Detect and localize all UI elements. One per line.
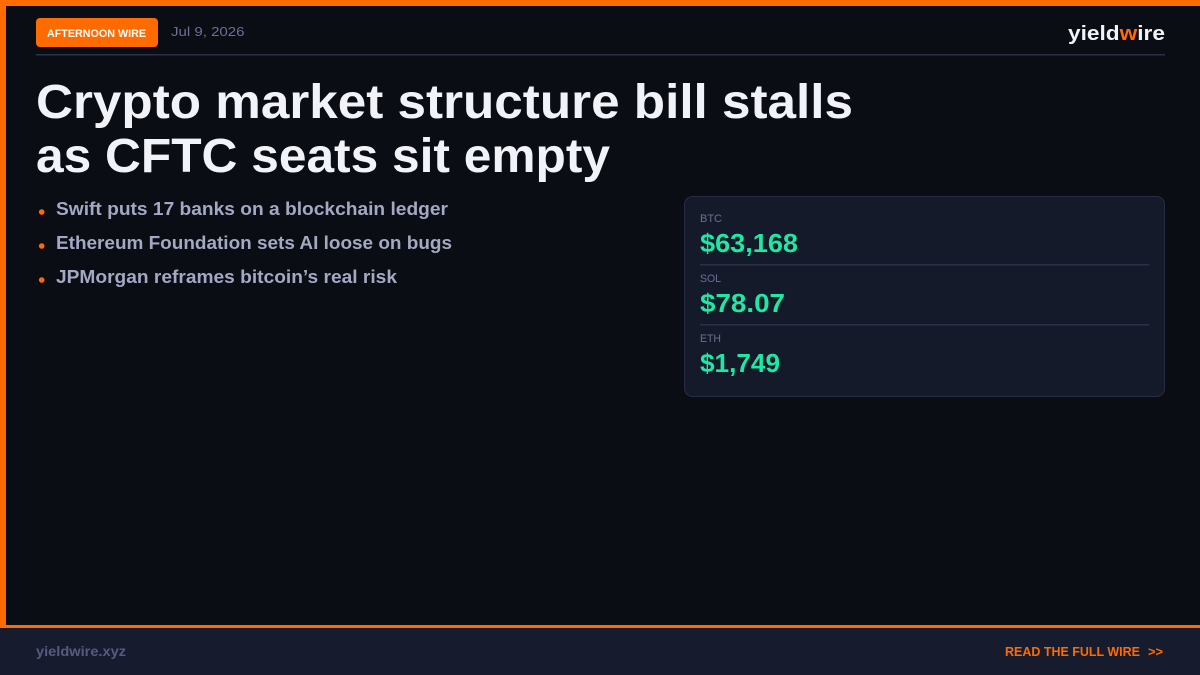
logo: yieldwire: yield wire (1068, 23, 1165, 45)
price: BTC: $63,168 (700, 228, 798, 258)
bullet list (39, 199, 452, 287)
price: BTC: BTC (700, 213, 722, 225)
bullet 3: JPMorgan reframes bitcoin’s real risk (56, 267, 398, 287)
price: ETH: $1,749 (700, 348, 780, 378)
price: BTC (700, 213, 798, 258)
call to action: >> (1148, 644, 1163, 659)
title (36, 76, 853, 183)
price: SOL: SOL (700, 273, 721, 285)
header (36, 18, 1165, 47)
badge: afternoon wire (36, 18, 158, 47)
price: SOL: $78.07 (700, 288, 785, 318)
call to action: READ THE FULL WIRE (1005, 644, 1140, 659)
price: ETH: ETH (700, 333, 721, 345)
price: SOL (700, 273, 785, 318)
footer bar (0, 625, 1200, 675)
badge: afternoon wire: AFTERNOON WIRE (47, 28, 146, 40)
bullet 2: Ethereum Foundation sets AI loose on bugs (56, 233, 452, 253)
title: as CFTC seats sit empty (36, 130, 610, 183)
date: Jul 9, 2026 (171, 24, 244, 39)
panel: prices (684, 196, 1164, 396)
title: Crypto market structure bill stalls (36, 76, 853, 129)
footer url: yieldwire.xyz (36, 644, 126, 659)
bullet 1: Swift puts 17 banks on a blockchain ledger (56, 199, 448, 219)
price: ETH (700, 333, 780, 378)
